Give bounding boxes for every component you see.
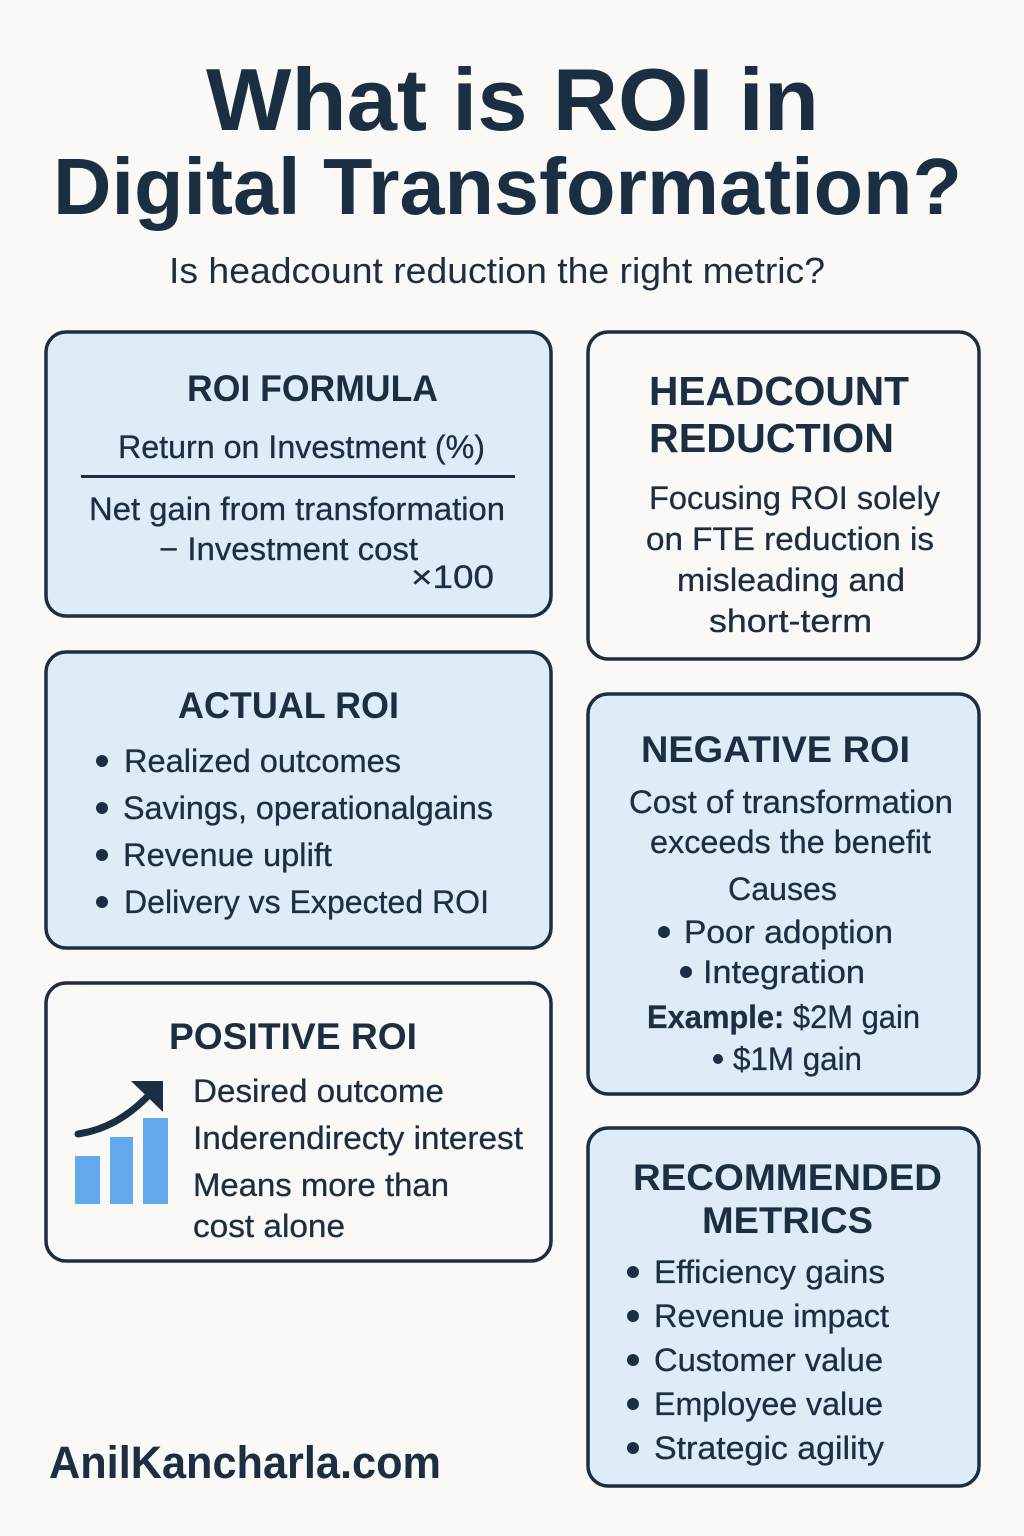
bullet list: recommended metrics [627, 1254, 889, 1466]
text: negative ROI definition: Cost of transformation [629, 784, 953, 820]
panel: headcount reduction [588, 332, 979, 659]
icon: rising bar chart with arrow [75, 1081, 168, 1204]
heading: positive ROI: POSITIVE ROI [169, 1016, 417, 1057]
text: example: Example: $2M gain [647, 999, 920, 1035]
formula numerator: Return on Investment (%) [118, 429, 485, 465]
formula denominator: Net gain from transformation [89, 491, 505, 527]
text: positive ROI: Desired outcome [193, 1073, 444, 1109]
text: positive ROI: Means more than [193, 1167, 449, 1203]
text: causes: Causes [728, 871, 837, 907]
bullet list: actual ROI: Savings, operationalgains [123, 790, 493, 826]
formula denominator: ×100 [411, 559, 494, 595]
text: causes [658, 871, 893, 990]
heading: recommended metrics [633, 1157, 942, 1241]
formula denominator: − Investment cost [159, 531, 418, 567]
text: example [647, 999, 920, 1077]
bullet list: actual ROI: Revenue uplift [123, 837, 332, 873]
title [53, 50, 962, 231]
bullet list: recommended metrics: Strategic agility [654, 1430, 884, 1466]
text: positive ROI: Inderendirecty interest [193, 1120, 523, 1156]
text: headcount reduction: on FTE reduction is [646, 521, 934, 557]
bullet list: actual ROI [96, 743, 493, 920]
panel: actual ROI [46, 652, 551, 948]
panel: ROI formula [46, 332, 551, 616]
text: causes: Integration [703, 954, 865, 990]
panel: recommended metrics [588, 1128, 979, 1486]
fraction bar [81, 475, 515, 478]
subtitle: Is headcount reduction the right metric? [169, 250, 825, 291]
title: What is ROI in [206, 50, 819, 149]
heading: headcount reduction: REDUCTION [649, 415, 894, 461]
panel: positive ROI [46, 983, 551, 1261]
text: negative ROI definition: exceeds the benefit [650, 824, 931, 860]
text: example: $1M gain [733, 1041, 862, 1077]
text: causes: Poor adoption [684, 914, 893, 950]
panel: negative ROI [588, 694, 979, 1094]
text: positive ROI [193, 1073, 523, 1244]
heading: negative ROI: NEGATIVE ROI [641, 729, 910, 770]
text: headcount reduction: short-term [709, 603, 872, 639]
formula denominator [89, 491, 505, 595]
text: positive ROI: cost alone [193, 1208, 345, 1244]
bullet list: recommended metrics: Revenue impact [654, 1298, 889, 1334]
heading: actual ROI: ACTUAL ROI [178, 685, 399, 726]
heading: recommended metrics: RECOMMENDED [633, 1157, 942, 1198]
bullet list: recommended metrics: Customer value [654, 1342, 883, 1378]
bullet list: recommended metrics: Efficiency gains [654, 1254, 885, 1290]
heading: ROI formula: ROI FORMULA [187, 368, 438, 409]
heading: headcount reduction [649, 368, 909, 461]
text: headcount reduction [646, 480, 940, 639]
heading: recommended metrics: METRICS [702, 1200, 873, 1241]
text: headcount reduction: misleading and [677, 562, 905, 598]
heading: headcount reduction: HEADCOUNT [649, 368, 909, 414]
bullet list: actual ROI: Delivery vs Expected ROI [124, 884, 489, 920]
title: Digital Transformation? [53, 142, 962, 231]
bullet list: recommended metrics: Employee value [654, 1386, 883, 1422]
footer: website: AnilKancharla.com [49, 1437, 441, 1488]
text: negative ROI definition [629, 784, 953, 860]
bullet list: actual ROI: Realized outcomes [124, 743, 401, 779]
text: headcount reduction: Focusing ROI solely [649, 480, 940, 516]
